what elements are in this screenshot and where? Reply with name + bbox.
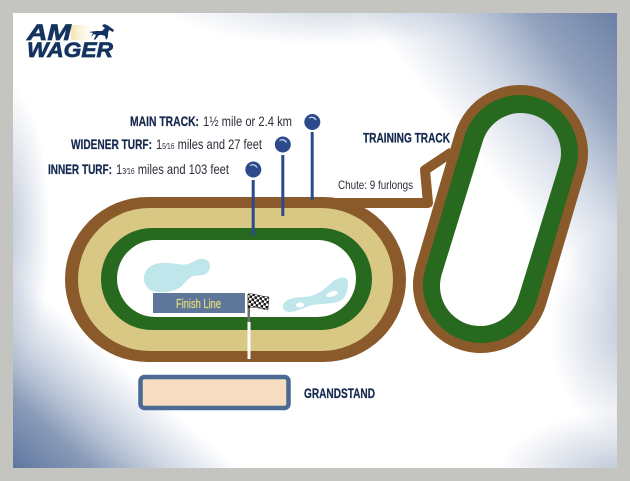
icon: checkered flag [248,294,269,310]
main track [65,152,452,362]
label: main track [130,113,292,129]
finish line box: Finish Line [176,296,221,311]
training track [481,153,520,285]
icon: racehorse [89,24,114,40]
label: inner turf: INNER TURF: [48,161,112,177]
label: chute: Chute: 9 furlongs [338,178,413,192]
label: inner turf [48,161,229,177]
pin: inner turf [245,162,261,236]
label: inner turf: 13⁄16 miles and 103 feet [116,161,229,177]
logo: AM Wager [26,20,114,62]
label: Widener turf: WIDENER TURF: [71,136,152,152]
grandstand [140,377,288,408]
finish marker [248,294,269,359]
label: main track: 1½ mile or 2.4 km [203,113,292,129]
label: main track: MAIN TRACK: [130,113,199,129]
label: grandstand: GRANDSTAND [304,386,375,401]
pond: right infield [283,278,348,312]
logo: AM Wager: WAGER [27,39,114,62]
pin: main track [304,114,320,200]
label: training track: TRAINING TRACK [363,130,450,146]
label: Widener turf [71,136,262,152]
pin: Widener turf [275,136,291,216]
label: Widener turf: 15⁄16 miles and 27 feet [156,136,262,152]
pond: left infield [144,259,210,292]
logo: AM Wager: AM [26,20,72,45]
chute connector [320,152,452,203]
finish line box [153,293,245,313]
